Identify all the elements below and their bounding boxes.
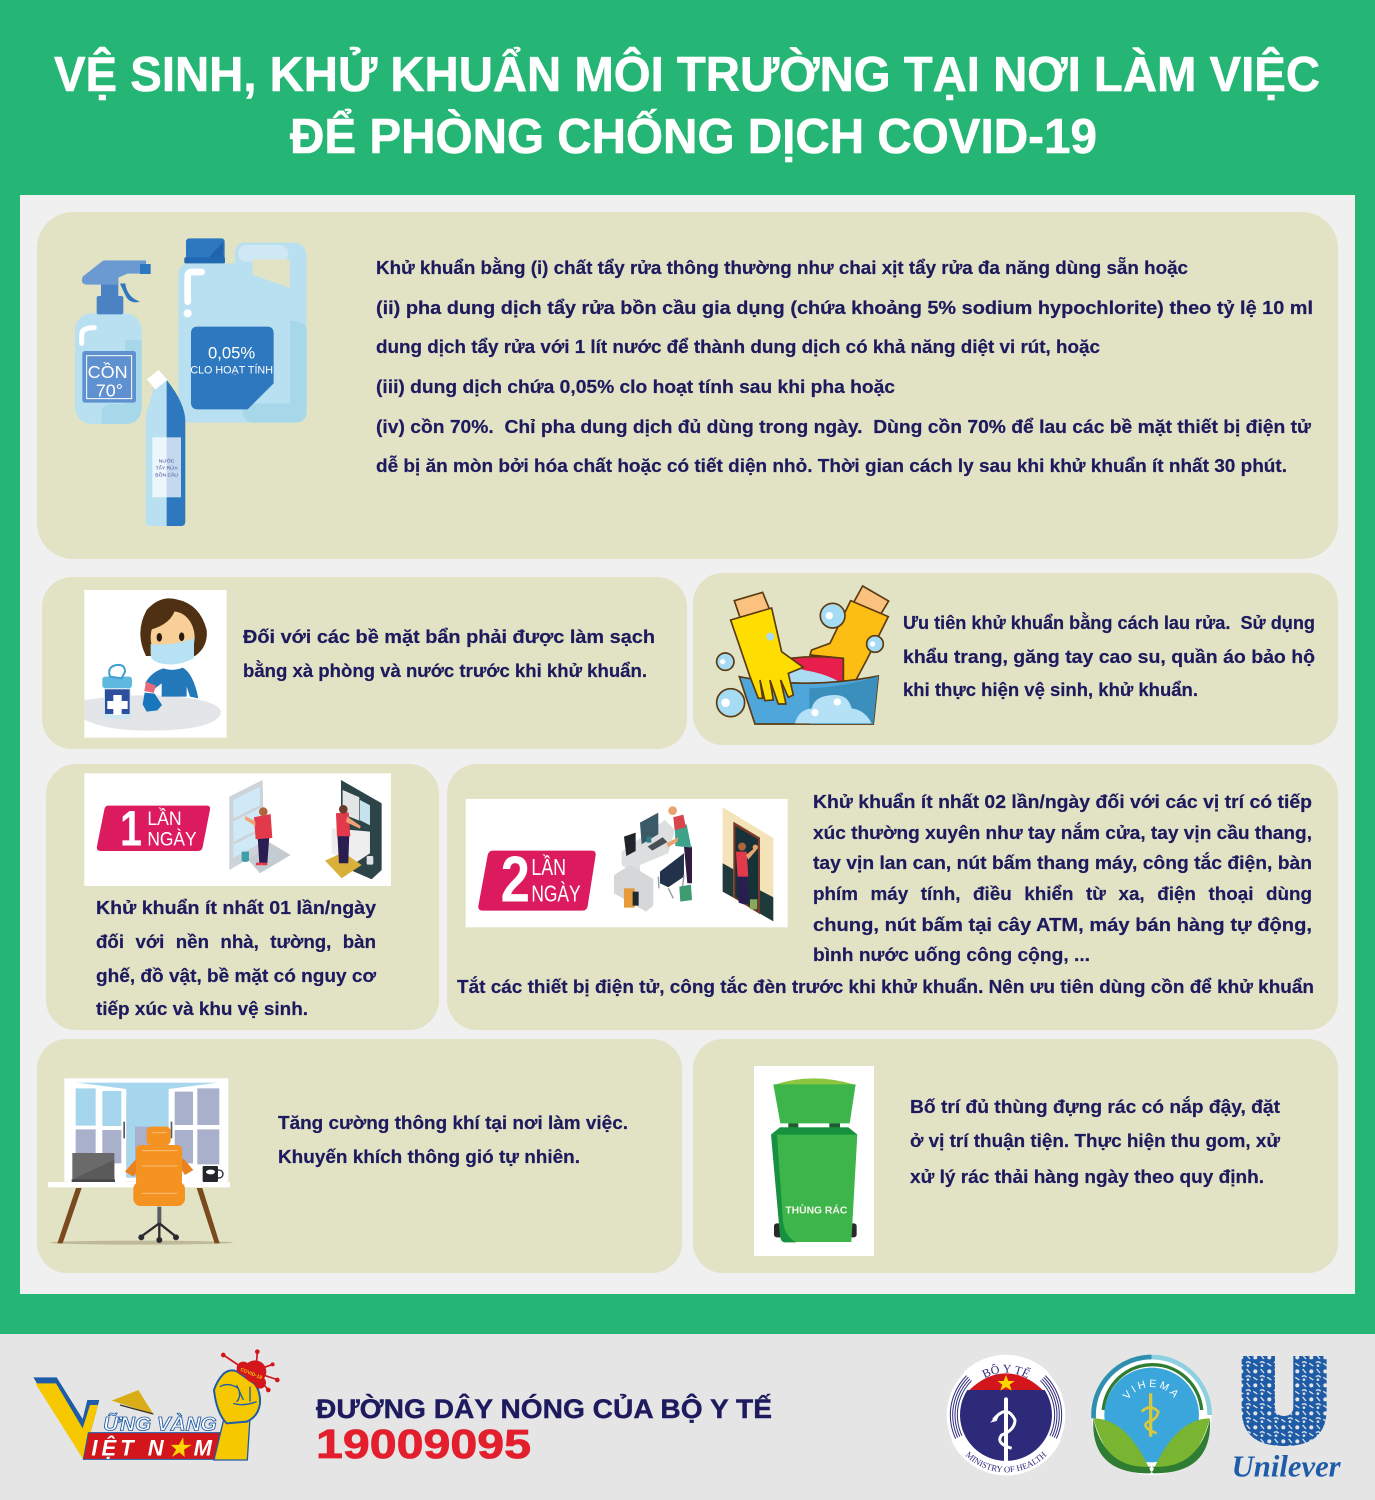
text block: bình nước uống công cộng, ... [813, 945, 1090, 965]
virus splat [221, 1349, 280, 1392]
text block [457, 792, 1314, 997]
title: VỆ SINH, KHỬ KHUẨN MÔI TRƯỜNG TẠI NƠI LÀM VIỆC [54, 47, 1320, 102]
text block: dung dịch tẩy rửa với 1 lít nước để thành dung dịch có khả năng diệt vi rút, hoặc [376, 337, 1100, 357]
badge: 1 lần ngày: NGÀY [147, 827, 197, 850]
logo: Unilever: Unilever [1232, 1450, 1342, 1484]
text block: xúc thường xuyên như tay nắm cửa, tay vịn cầu thang, [813, 822, 1312, 843]
icon: spray bottle, 70 degree alcohol: 70° [96, 381, 123, 401]
badge: 2 lần ngày [478, 843, 596, 916]
text block [243, 627, 655, 681]
icon: toilet cleaner bottle: NƯỚC [159, 457, 175, 464]
text block: bằng xà phòng và nước trước khi khử khuẩn. [243, 660, 647, 681]
text block: phím máy tính, điều khiển từ xa, điện thoại dùng [813, 884, 1312, 904]
text block: ghế, đồ vật, bề mặt có nguy cơ [96, 966, 376, 986]
text block [903, 612, 1315, 700]
text block: đối với nền nhà, tường, bàn [96, 932, 376, 952]
badge: 2 lần ngày: LẦN [531, 854, 566, 880]
text block: (ii) pha dung dịch tẩy rửa bồn cầu gia dụng (chứa khoảng 5% sodium hypochlorite) theo tỷ lệ 10 ml [376, 298, 1313, 318]
text block: Khuyến khích thông gió tự nhiên. [278, 1147, 580, 1167]
footer [0, 1334, 1375, 1500]
logo: VIHEMA: VIHEMA [1122, 1380, 1178, 1398]
logo: VIHEMA [1091, 1354, 1212, 1475]
text block: khẩu trang, găng tay cao su, quần áo bảo hộ [903, 647, 1315, 667]
illustration: once a day cleaning [84, 773, 391, 886]
badge: 2 lần ngày: NGÀY [531, 881, 581, 907]
logo: Unilever [1232, 1356, 1342, 1484]
figure: person cleaning desk [614, 806, 692, 912]
text block: dễ bị ăn mòn bởi hóa chất hoặc có tiết diện nhỏ. Thời gian cách ly sau khi khử khuẩn ít nhất 30 phút. [376, 455, 1287, 476]
text block: tay vịn lan can, nút bấm thang máy, công tắc điện, bàn [813, 852, 1312, 873]
hotline [316, 1392, 772, 1467]
icon: spray bottle, 70 degree alcohol [75, 260, 151, 424]
virus splat: COVID-19 [239, 1367, 263, 1381]
panel: clean dirty surfaces [42, 577, 687, 749]
text block: (iii) dung dịch chứa 0,05% clo hoạt tính sau khi pha hoặc [376, 377, 895, 397]
figure: person cleaning door [723, 807, 773, 921]
icon: masked person wiping table [84, 590, 227, 738]
panel: rubbish bins [693, 1039, 1338, 1273]
text block: (iv) cồn 70%. Chỉ pha dung dịch đủ dùng trong ngày. Dùng cồn 70% để lau các bề mặt thiết bị điện tử [376, 417, 1312, 437]
figure: person cleaning window [229, 780, 291, 873]
logo: Vững Vàng Việt Nam [33, 1349, 280, 1460]
panel: prioritise wiping [693, 573, 1338, 745]
icon: spray bottle, 70 degree alcohol: CỒN [88, 361, 128, 382]
figure: person cleaning bathroom [325, 780, 382, 879]
logo: Vững Vàng Việt Nam: IỆT N★M [91, 1435, 213, 1460]
text block: ở vị trí thuận tiện. Thực hiện thu gom, xử [910, 1131, 1281, 1151]
text block [96, 898, 376, 1019]
icon: toilet cleaner bottle: BỒN CẦU [155, 472, 178, 479]
icon: toilet cleaner bottle [146, 370, 185, 526]
title [54, 47, 1320, 164]
badge: 1 lần ngày: 1 [120, 800, 142, 856]
text block: Đối với các bề mặt bẩn phải được làm sạch [243, 627, 655, 647]
text block [278, 1113, 628, 1167]
panel: once a day [46, 764, 439, 1030]
logo: Bộ Y tế: BỘ Y TẾ [982, 1364, 1032, 1378]
icon: chlorine jug [178, 238, 307, 423]
icon: green rubbish bin [754, 1066, 874, 1256]
text block: Khử khuẩn ít nhất 01 lần/ngày [96, 898, 376, 918]
title: ĐỂ PHÒNG CHỐNG DỊCH COVID-19 [290, 109, 1097, 164]
hotline: 19009095 [316, 1421, 531, 1467]
text block: Tắt các thiết bị điện tử, công tắc đèn trước khi khử khuẩn. Nên ưu tiên dùng cồn để khử khuẩn [457, 976, 1314, 997]
logo: Bộ Y tế [946, 1354, 1066, 1476]
logo: Bộ Y tế: MINISTRY OF HEALTH [966, 1451, 1046, 1472]
panel: cleaning chemicals [37, 212, 1338, 559]
panel: twice a day [447, 764, 1338, 1030]
icon: desk by open window [48, 1078, 233, 1245]
logo: Vững Vàng Việt Nam: ỮNG VÀNG [103, 1412, 217, 1436]
text block: Khử khuẩn bằng (i) chất tẩy rửa thông thường như chai xịt tẩy rửa đa năng dùng sẵn hoặc [376, 256, 1188, 278]
icon: toilet cleaner bottle: TẨY RỬA [156, 465, 178, 472]
text block: chung, nút bấm tại cây ATM, máy bán hàng tự động, [813, 915, 1312, 935]
text block: Ưu tiên khử khuẩn bằng cách lau rửa. Sử dụng [903, 612, 1315, 633]
badge: 1 lần ngày [97, 800, 210, 856]
icon: green rubbish bin: THÙNG RÁC [785, 1204, 847, 1216]
icon: chlorine jug: CLO HOẠT TÍNH [190, 363, 273, 376]
icon: chlorine jug: 0,05% [208, 344, 255, 363]
text block: xử lý rác thải hàng ngày theo quy định. [910, 1167, 1264, 1187]
text block: Bố trí đủ thùng đựng rác có nắp đậy, đặt [910, 1096, 1280, 1117]
text block: Tăng cường thông khí tại nơi làm việc. [278, 1113, 628, 1133]
text block: Khử khuẩn ít nhất 02 lần/ngày đối với các vị trí có tiếp [813, 792, 1312, 812]
text block [910, 1096, 1281, 1187]
icon: rubber gloves washing in basin [717, 586, 889, 724]
hotline: ĐƯỜNG DÂY NÓNG CỦA BỘ Y TẾ [316, 1392, 772, 1424]
panel: ventilation [37, 1039, 682, 1273]
text block: khi thực hiện vệ sinh, khử khuẩn. [903, 680, 1198, 700]
content area [20, 195, 1355, 1294]
text block [376, 256, 1313, 476]
badge: 1 lần ngày: LẦN [147, 807, 182, 830]
illustration: twice a day cleaning [466, 799, 788, 927]
badge: 2 lần ngày: 2 [501, 843, 530, 916]
text block: tiếp xúc và khu vệ sinh. [96, 999, 308, 1019]
